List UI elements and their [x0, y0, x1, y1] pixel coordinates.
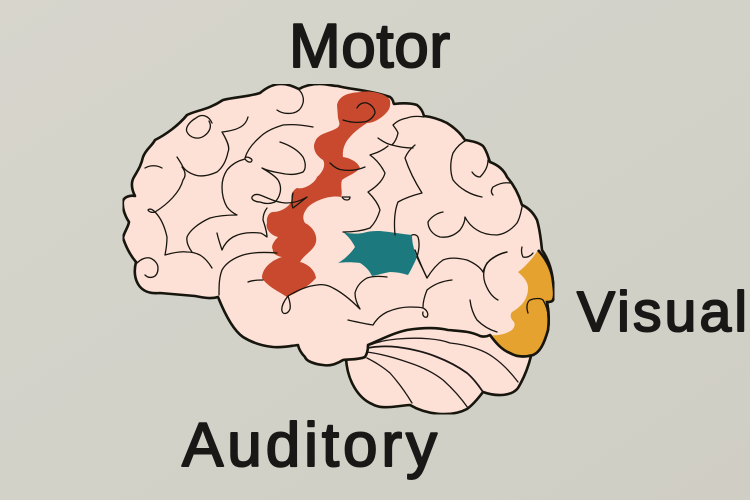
cerebellum folds: [367, 338, 518, 408]
visual area outline: [490, 250, 554, 356]
visual area: orange patch: [490, 250, 554, 356]
auditory area: teal patch: [338, 231, 417, 276]
motor area: red strip: [262, 91, 390, 297]
brain illustration: [123, 84, 554, 414]
cerebellum: [346, 325, 531, 414]
cerebrum outline: [123, 84, 554, 365]
cortical folds: [137, 89, 548, 332]
label: Visual: Visual: [577, 280, 747, 344]
label: Motor: Motor: [289, 12, 450, 81]
label: Auditory: Auditory: [182, 411, 437, 480]
